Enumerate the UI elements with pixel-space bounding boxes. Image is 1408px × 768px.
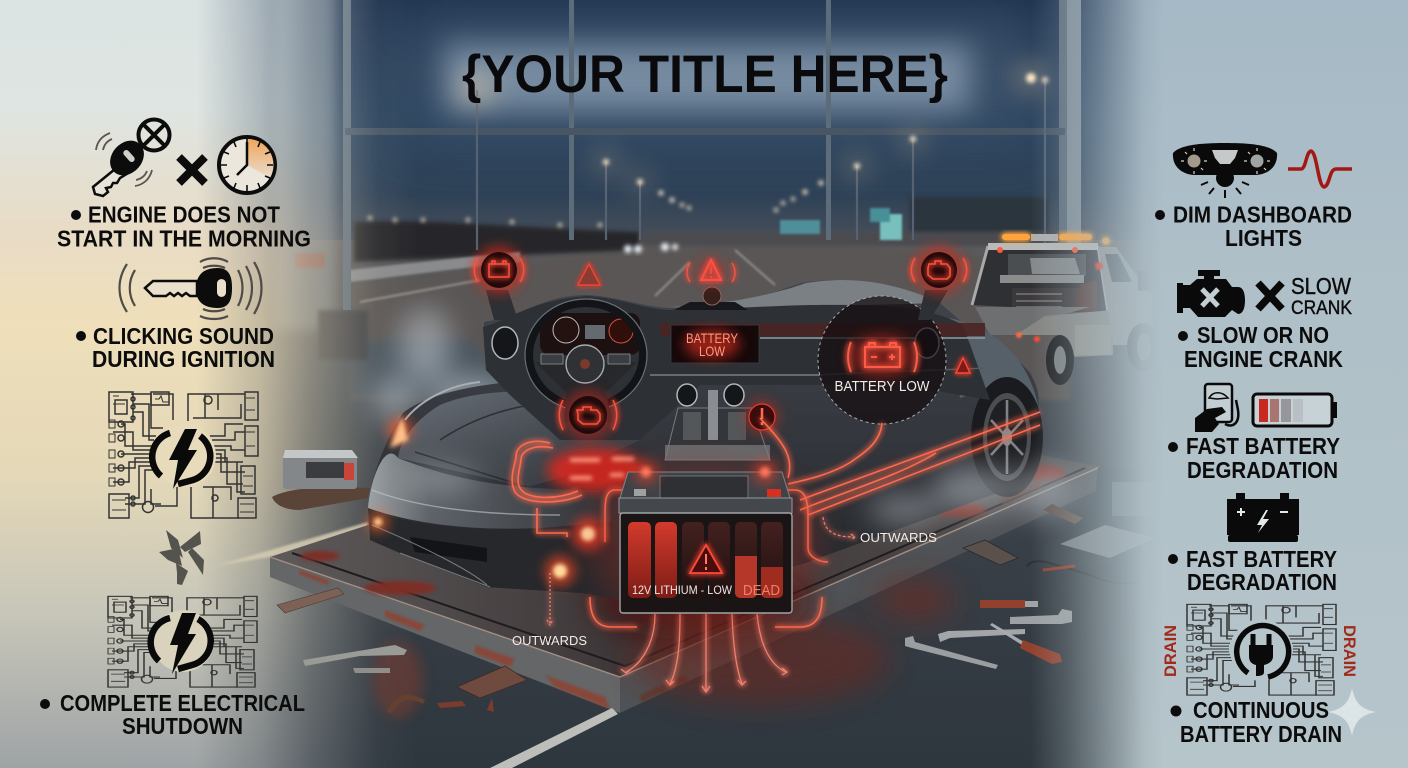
text: slow or no engine crank (1178, 322, 1343, 372)
icon: cross (1258, 283, 1282, 309)
label: slow crank: CRANK (1291, 298, 1352, 319)
text: engine does not start: ENGINE DOES NOT (88, 202, 280, 228)
tow truck (972, 234, 1159, 385)
text: slow or no engine crank: ENGINE CRANK (1184, 346, 1343, 372)
warning pod: engine (911, 246, 967, 320)
bumper (370, 512, 620, 600)
warning: engine circle (559, 390, 617, 440)
left panel backdrop (0, 0, 420, 768)
label: outwards left: OUTWARDS (512, 633, 587, 648)
text: clicking sound: CLICKING SOUND (93, 323, 274, 349)
panel: right symptoms (1155, 143, 1359, 747)
car nose (368, 454, 612, 529)
car body (368, 280, 1043, 600)
smoke right (400, 464, 1075, 524)
icon: multimeter in hand (1195, 384, 1238, 432)
icon: clicking key (120, 258, 262, 319)
truck cab (1098, 247, 1153, 345)
centre screen: battery low: BATTERY (686, 330, 739, 346)
instrument cluster (540, 313, 640, 355)
platform slab (270, 430, 1100, 713)
text: complete electrical shutdown: SHUTDOWN (122, 713, 243, 739)
centre screen: battery low (671, 325, 759, 363)
wrench lower (905, 636, 998, 669)
wrench long (938, 629, 1025, 642)
truck lights (988, 243, 1098, 250)
label: drain left: DRAIN (1161, 625, 1180, 677)
truck cabin frame (972, 246, 1108, 312)
label: slow crank: SLOW (1291, 273, 1351, 299)
rear wheel (971, 377, 1043, 497)
tools and toolkit right (905, 467, 1173, 669)
text: slow or no engine crank: SLOW OR NO (1197, 322, 1329, 348)
hood glass (398, 392, 640, 487)
battery label: 12V LITHIUM - LOW (632, 583, 733, 597)
icon: dim dashboard (1173, 143, 1277, 198)
icon: key, no-start and morning clock (93, 120, 275, 196)
floor details (373, 578, 955, 768)
air vents (492, 327, 939, 406)
warning triangle centre (687, 258, 735, 286)
text: complete electrical shutdown (40, 690, 305, 739)
outward arrows from battery (547, 517, 855, 692)
steering wheel (525, 299, 647, 422)
battery low circle callout: BATTERY LOW (834, 378, 930, 395)
headlights and glows (368, 416, 643, 586)
label: outwards right: OUTWARDS (860, 530, 937, 545)
street lights (368, 67, 1048, 300)
text: continuous battery drain: CONTINUOUS (1193, 697, 1329, 723)
text: clicking sound: DURING IGNITION (92, 346, 275, 372)
text: engine does not start: START IN THE MORNING (57, 226, 311, 252)
toolbox left (272, 450, 370, 510)
battery (590, 460, 820, 630)
battery low circle callout (818, 296, 946, 424)
highway beyond window (350, 197, 1070, 400)
text: fast battery degradation, first: DEGRADATION (1187, 457, 1338, 483)
text: complete electrical shutdown: COMPLETE ELECTRICAL (60, 690, 305, 716)
label: slow crank (1291, 273, 1352, 319)
laptop (1092, 467, 1173, 530)
window frame (343, 0, 1081, 310)
pale strip behind platform (215, 522, 368, 566)
text: dim dashboard lights (1155, 202, 1352, 251)
title backdrop glow (400, 10, 1040, 135)
icon: shattered arrows (159, 530, 204, 585)
icon: prohibition circle (138, 120, 170, 150)
debris left (277, 588, 527, 713)
truck wheels (1046, 335, 1074, 385)
battery label: DEAD (743, 582, 780, 599)
text: engine does not start (57, 202, 311, 252)
left pillar haze and interior (275, 0, 368, 360)
dashboard (483, 287, 990, 460)
title: {YOUR TITLE HERE} (462, 45, 948, 104)
icon: multiply cross (179, 157, 205, 183)
text: fast battery degradation, first: FAST BATTERY (1186, 433, 1340, 459)
dash clock (674, 287, 748, 310)
truck bed and side panels (975, 307, 1090, 335)
icon: engine with x (1177, 270, 1245, 317)
text: clicking sound (76, 323, 275, 372)
wrench (1010, 609, 1072, 624)
tool tray (1043, 520, 1167, 568)
warning: exclamation circle (745, 400, 779, 434)
icon: battery (1227, 493, 1299, 542)
text: fast battery degradation, second: FAST BATTERY (1186, 546, 1337, 572)
cable (1027, 561, 1140, 583)
car roof highlight (670, 280, 940, 308)
car rear quarter (950, 318, 1038, 405)
icon: sparkle watermark (1328, 688, 1376, 736)
smoke left (373, 307, 510, 422)
icon: circuit with plug (1187, 604, 1336, 695)
text: fast battery degradation, first (1168, 433, 1340, 483)
text: dim dashboard lights: DIM DASHBOARD (1173, 202, 1352, 228)
centre screen: battery low: LOW (699, 343, 726, 359)
warning triangle small (578, 264, 600, 285)
glowing wires (512, 412, 1040, 627)
icon: pulse line (1288, 151, 1352, 187)
right panel backdrop (1030, 0, 1408, 768)
screwdriver (980, 600, 1025, 608)
text: continuous battery drain: BATTERY DRAIN (1180, 721, 1342, 747)
battery label (632, 582, 780, 599)
text: dim dashboard lights: LIGHTS (1225, 225, 1302, 251)
icon: circuit with lightning, second (108, 596, 257, 687)
panel: left symptoms (40, 120, 311, 739)
icon: car key (93, 133, 152, 196)
text: fast battery degradation, second (1168, 546, 1337, 595)
icon: clock (219, 137, 275, 193)
text: continuous battery drain (1170, 697, 1342, 747)
icon: circuit with lightning (109, 392, 258, 518)
centre console (665, 408, 770, 460)
battery warning triangle (690, 545, 722, 573)
battery cells (628, 522, 783, 598)
text: fast battery degradation, second: DEGRADATION (1187, 569, 1337, 595)
warning triangle near wheel (956, 358, 970, 373)
label: drain right: DRAIN (1340, 625, 1359, 677)
piece on ground (963, 540, 1018, 565)
warning pod: battery (474, 246, 524, 320)
screwdriver crossed (990, 623, 1024, 645)
icon: low battery gauge (1253, 394, 1337, 426)
